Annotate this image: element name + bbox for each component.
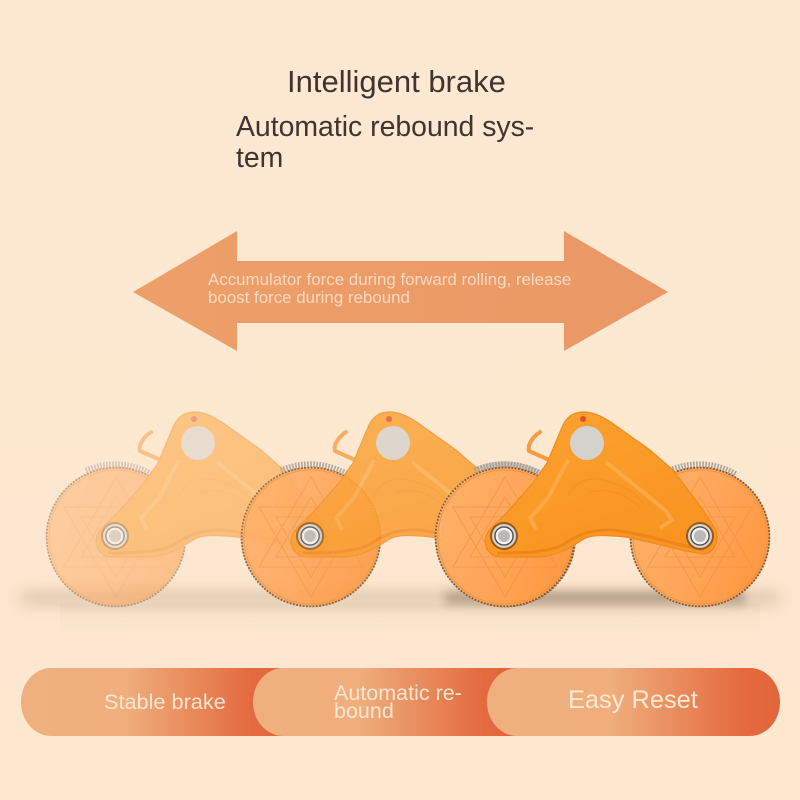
pill: automatic rebound bbox=[253, 668, 553, 736]
subtitle: tem bbox=[236, 142, 283, 174]
title: Intelligent brake bbox=[287, 64, 506, 99]
pill: easy reset bbox=[487, 668, 780, 736]
product: front position bbox=[435, 412, 770, 607]
ground shadow bbox=[20, 592, 780, 654]
arrow caption: boost force during rebound bbox=[208, 288, 410, 307]
pill: stable brake bbox=[21, 668, 321, 736]
pill: easy reset: Easy Reset bbox=[568, 686, 698, 714]
pill: automatic rebound: bound bbox=[334, 699, 394, 723]
pill: automatic rebound: Automatic re- bbox=[334, 681, 462, 705]
pill: stable brake: Stable brake bbox=[104, 689, 226, 714]
product: faded middle position bbox=[241, 412, 576, 607]
arrow: forward and rebound bbox=[133, 231, 668, 351]
product: faded rear position bbox=[46, 412, 381, 607]
arrow caption: Accumulator force during forward rolling, release bbox=[208, 270, 571, 289]
subtitle: Automatic rebound sys- bbox=[236, 111, 534, 143]
